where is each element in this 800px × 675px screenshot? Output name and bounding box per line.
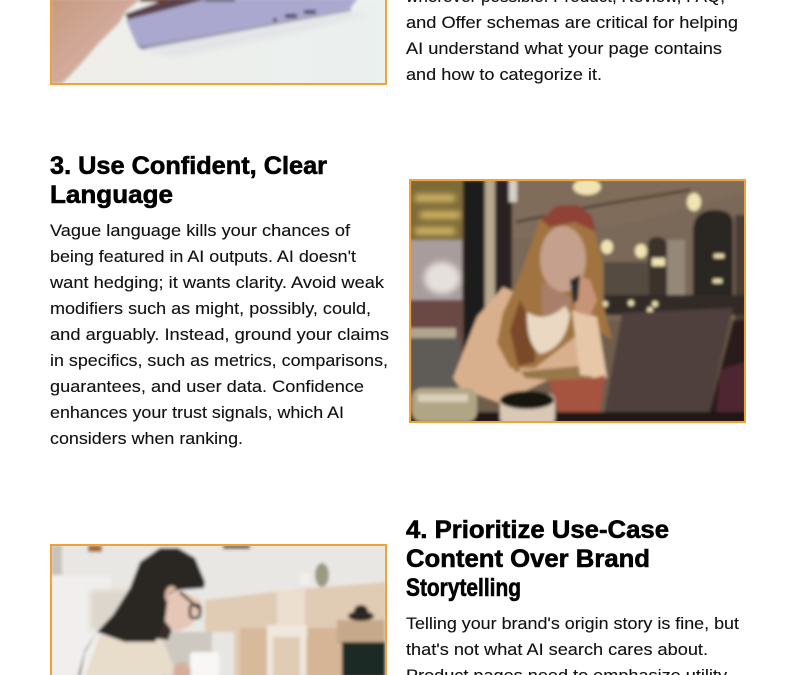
body text: section 4 xyxy=(406,614,739,675)
body text: section 3: want hedging; it wants clarity. Avoid weak xyxy=(49,273,385,292)
body text: section 3: and arguably. Instead, ground your claims xyxy=(50,325,389,344)
body text: section 4: Telling your brand's origin story is fine, but xyxy=(406,614,739,633)
body text: schema paragraph end: and how to categorize it. xyxy=(406,65,602,84)
body text: schema paragraph end: and Offer schemas are critical for helping xyxy=(406,13,738,32)
body text: section 3: Vague language kills your chances of xyxy=(50,221,350,240)
photo: hand on laptop xyxy=(50,0,388,88)
body text: section 3: being featured in AI outputs. AI doesn't xyxy=(50,247,356,266)
heading: 3. Use Confident, Clear Language xyxy=(50,152,327,209)
photo: woman with glasses holding a mug xyxy=(50,544,388,675)
heading: 4. Prioritize Use-Case Content Over Brand Storytelling: 4. Prioritize Use-Case xyxy=(406,516,669,544)
photo: woman on phone at laptop in cafe xyxy=(409,179,747,424)
heading: 4. Prioritize Use-Case Content Over Brand Storytelling: Storytelling xyxy=(406,574,521,602)
heading: 4. Prioritize Use-Case Content Over Brand Storytelling xyxy=(406,516,669,602)
heading: 3. Use Confident, Clear Language: 3. Use Confident, Clear xyxy=(50,152,327,180)
body text: section 4: that's not what AI search cares about. xyxy=(406,640,708,659)
body text: section 3: considers when ranking. xyxy=(50,429,243,448)
body text: section 3: guarantees, and user data. Confidence xyxy=(50,377,364,396)
heading: 4. Prioritize Use-Case Content Over Brand Storytelling: Content Over Brand xyxy=(406,545,650,573)
body text: section 3: in specifics, such as metrics, comparisons, xyxy=(50,351,388,370)
body text: section 3: enhances your trust signals, which AI xyxy=(50,403,344,422)
body text: section 3 xyxy=(49,221,389,448)
body text: schema paragraph end: AI understand what your page contains xyxy=(406,39,722,58)
heading: 3. Use Confident, Clear Language: Language xyxy=(50,181,173,209)
body text: section 3: modifiers such as might, possibly, could, xyxy=(50,299,371,318)
body text: schema paragraph end xyxy=(405,0,738,84)
